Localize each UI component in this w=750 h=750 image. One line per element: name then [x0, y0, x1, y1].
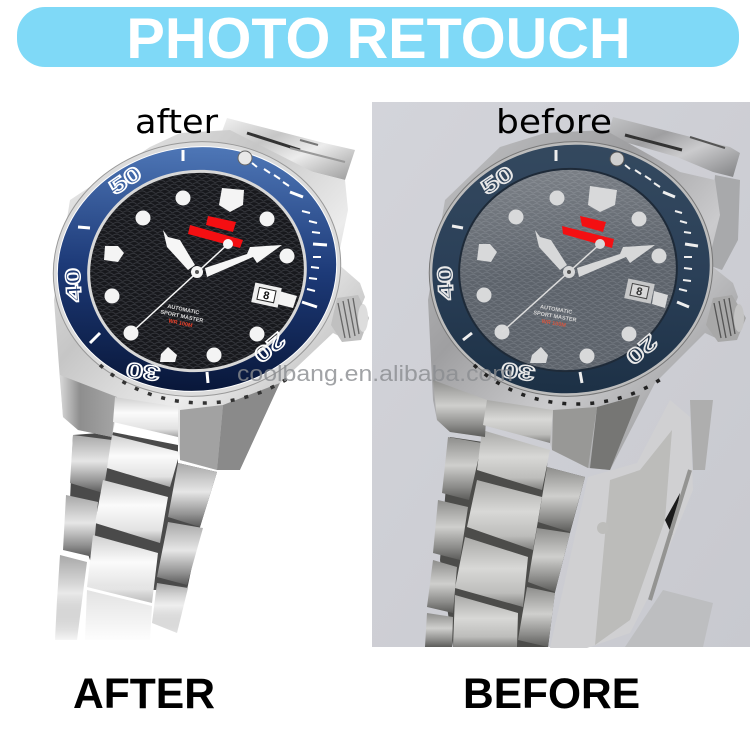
- after: crown: [331, 295, 369, 342]
- before: bezel markers: [452, 150, 698, 383]
- before: bezel: [416, 127, 726, 411]
- after: dial text: WR 100M: [168, 318, 193, 329]
- after: bezel numerals: 50: [104, 161, 146, 200]
- before: dial: [447, 156, 689, 384]
- after: red logo: [188, 216, 243, 248]
- after: case: [54, 130, 365, 470]
- before: top bracelet: [607, 117, 740, 177]
- before watch: [413, 117, 746, 648]
- before: far bracelet strap: [708, 175, 740, 270]
- before: dial text: [532, 303, 578, 331]
- before: dial ring: [445, 154, 691, 386]
- after: hands: [131, 230, 282, 333]
- before: bottom bracelet: [425, 430, 585, 647]
- after: bottom bracelet: [40, 432, 217, 643]
- after: lower lugs: [60, 375, 300, 470]
- after: dial text: [158, 303, 205, 331]
- panel: before photo background: [372, 102, 750, 647]
- label: before: before: [496, 102, 612, 141]
- before: hands: [502, 230, 655, 332]
- before: hour markers: [476, 186, 668, 364]
- before: bezel edge: [413, 123, 729, 415]
- after: bezel pearl: [238, 151, 252, 165]
- after: dial text: SPORT MASTER: [160, 310, 204, 324]
- before: date window: [624, 279, 655, 304]
- title: PHOTO RETOUCH: [126, 7, 631, 71]
- after: date window: [251, 283, 282, 308]
- before: bezel numerals: 30: [500, 357, 536, 386]
- before: bezel teeth: [474, 365, 664, 404]
- before: bezel numerals: 20: [621, 330, 663, 370]
- before: dial text: SPORT MASTER: [533, 310, 577, 324]
- before: bezel numerals: 50: [476, 161, 518, 200]
- banner: [17, 7, 739, 71]
- after: bezel teeth: [100, 365, 290, 403]
- before: dial text: AUTOMATIC: [540, 304, 573, 316]
- after: bezel edge: [37, 123, 357, 415]
- after: top bracelet: [220, 118, 355, 180]
- label: after: after: [135, 102, 218, 141]
- after: bezel numerals: [60, 161, 291, 386]
- before: clasp: [550, 400, 713, 648]
- after: hour markers: [104, 188, 297, 362]
- before: bezel pearl: [610, 152, 624, 166]
- caption: before: BEFORE: [463, 671, 640, 718]
- before: crown: [706, 295, 746, 342]
- before: bezel numerals: 40: [432, 265, 458, 301]
- before: red logo: [562, 216, 614, 248]
- after watch: [37, 118, 369, 643]
- after: bezel markers: [78, 150, 327, 383]
- caption: after: AFTER: [73, 670, 215, 718]
- before: bezel numerals: [432, 161, 663, 386]
- after: bezel numerals: 20: [249, 328, 291, 368]
- after: bezel: [41, 129, 353, 409]
- after: date window: 8: [262, 290, 271, 303]
- before: date window: 8: [635, 286, 644, 299]
- after: dial text: AUTOMATIC: [167, 304, 200, 316]
- before: case: [428, 130, 738, 470]
- before: dial glare: [447, 156, 689, 384]
- before: lower lugs: [433, 380, 640, 470]
- after: bezel numerals: 30: [125, 357, 161, 386]
- after: dial: [77, 159, 317, 383]
- after: bezel numerals: 40: [60, 267, 86, 303]
- after: dial ring: [74, 156, 320, 386]
- watermark: coolbang.en.alibaba.com: [237, 361, 513, 386]
- before: dial text: WR 100M: [541, 319, 567, 329]
